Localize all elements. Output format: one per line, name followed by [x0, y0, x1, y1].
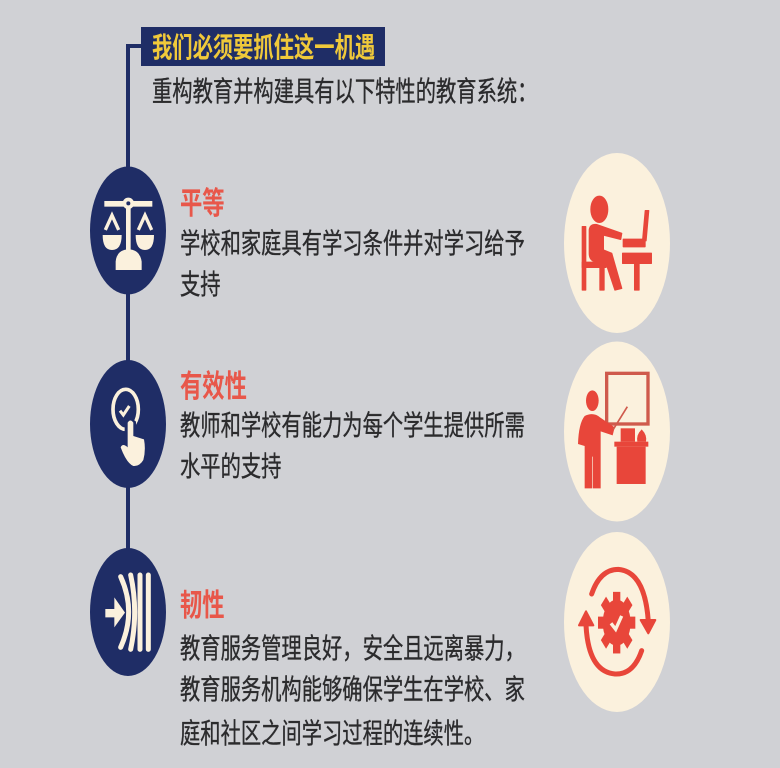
icon: student at desk: [564, 153, 670, 333]
icon: teacher at board: [564, 342, 670, 522]
subtitle: 重构教育并构建具有以下特性的教育系统：: [152, 76, 537, 108]
text: resilience line 3: 庭和社区之间学习过程的连续性。: [180, 718, 484, 750]
text: equality: 学校和家庭具有学习条件并对学习给予: [180, 228, 525, 260]
title banner: 我们必须要抓住这一机遇: [152, 32, 375, 64]
heading: resilience: 韧性: [180, 588, 225, 623]
text: effectiveness: 教师和学校有能力为每个学生提供所需: [180, 410, 525, 442]
heading: equality: 平等: [180, 186, 225, 221]
text: resilience line 2: 教育服务机构能够确保学生在学校、家: [180, 674, 525, 706]
panel: resilience: [90, 532, 670, 750]
icon: barrier with arrow: [90, 548, 166, 676]
panel: equality: [90, 153, 670, 333]
heading: effectiveness: 有效性: [180, 369, 247, 404]
timeline connector: [128, 46, 142, 550]
icon: scales: [90, 166, 166, 294]
text: effectiveness line 2: 水平的支持: [180, 451, 281, 483]
panel: effectiveness: [90, 342, 670, 522]
text: equality line 2: 支持: [180, 269, 221, 301]
icon: touch check: [90, 360, 166, 488]
text: resilience: 教育服务管理良好，安全且远离暴力，: [180, 633, 525, 665]
icon: gear cycle: [564, 532, 670, 712]
